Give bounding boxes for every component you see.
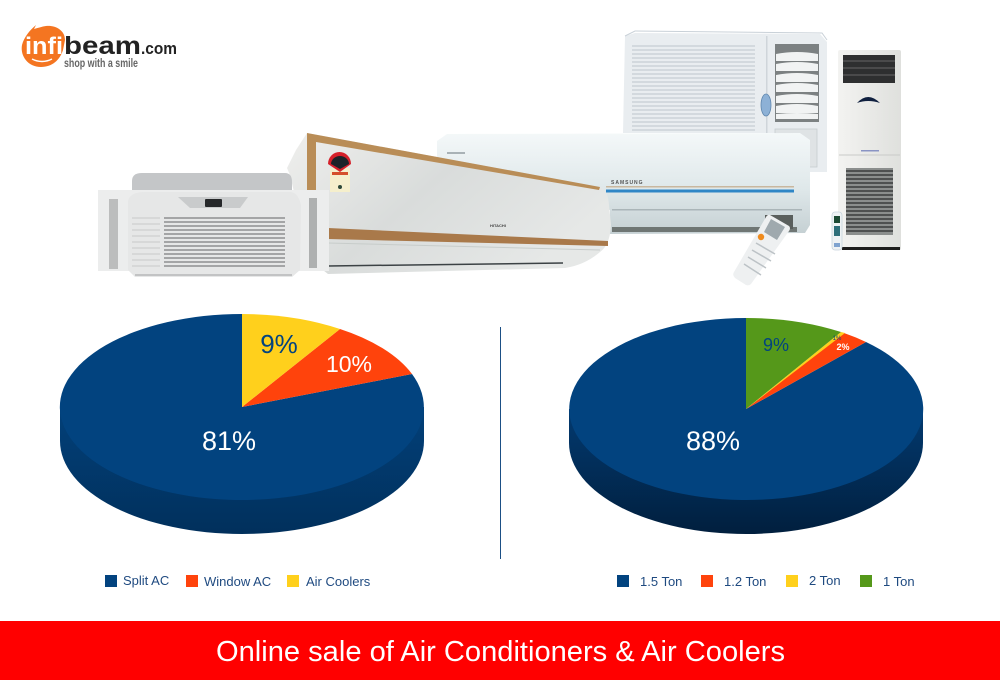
value: 1%: 1% — [833, 336, 842, 342]
pie chart: tonnage — [569, 318, 923, 534]
legend: tonnage — [617, 573, 915, 589]
product: Hitachi wall split unit: HITACHI — [490, 223, 506, 228]
legend: tonnage: 2 Ton — [809, 573, 841, 588]
slice: Window AC 10% — [242, 329, 412, 407]
legend: AC types: Air Coolers — [306, 574, 371, 589]
product: Hitachi wall split unit — [287, 133, 611, 274]
slice: 2 Ton — [746, 332, 845, 409]
product: handheld remote control — [733, 215, 790, 285]
legend: tonnage: 1 Ton — [883, 574, 915, 589]
legend: tonnage: 1.2 Ton — [724, 574, 766, 589]
product: small tower remote — [832, 212, 842, 250]
logo: infibeam: infi — [25, 33, 63, 60]
legend: AC types: Split AC — [123, 573, 169, 588]
product: window air conditioner — [623, 31, 827, 172]
slice: Split AC 81% — [60, 314, 424, 500]
product: window air cooler — [98, 173, 329, 277]
legend: AC types: Window AC — [204, 574, 271, 589]
product: Samsung wall split unit: SAMSUNG — [611, 180, 644, 186]
slice: 1.2 Ton — [746, 333, 866, 409]
icon: energy star label — [328, 152, 351, 192]
logo: infibeam: beam — [64, 32, 141, 60]
title banner — [0, 621, 1000, 680]
value: 10%: 10% — [326, 351, 372, 377]
slice: Air Coolers 9% — [242, 314, 340, 407]
product: floor-standing tower unit — [838, 50, 901, 250]
value: 88%: 88% — [686, 426, 740, 456]
slice: 1.5 Ton 88% — [569, 318, 923, 500]
product: Samsung wall split unit — [437, 133, 810, 234]
logo: infibeam: .com — [141, 39, 177, 58]
divider — [500, 327, 501, 559]
value: 2%: 2% — [836, 342, 850, 352]
value: 81%: 81% — [202, 426, 256, 456]
legend: AC types — [105, 573, 371, 589]
slice: 1 Ton 9% — [746, 318, 841, 409]
legend: tonnage: 1.5 Ton — [640, 574, 682, 589]
logo: infibeam: shop with a smile — [64, 56, 138, 70]
pie chart: AC types — [60, 314, 424, 534]
value: 9%: 9% — [763, 335, 789, 355]
title banner: Online sale of Air Conditioners & Air Coolers — [216, 636, 785, 668]
pie side — [569, 409, 923, 534]
pie side — [60, 407, 424, 534]
logo: infibeam — [22, 25, 177, 70]
value: 9%: 9% — [260, 329, 298, 359]
